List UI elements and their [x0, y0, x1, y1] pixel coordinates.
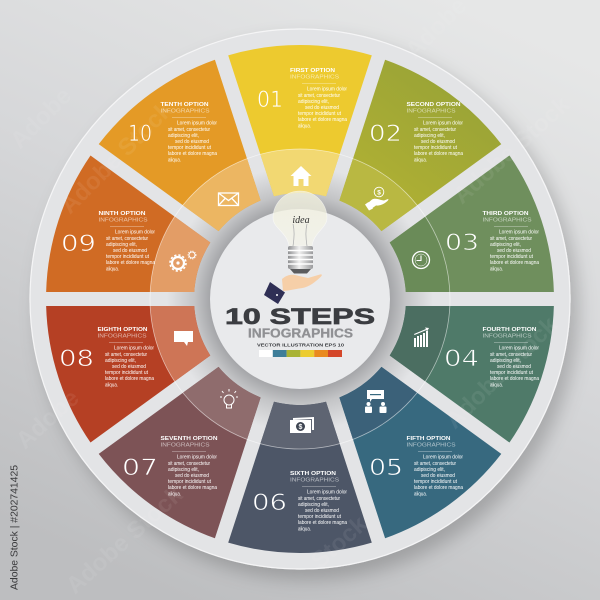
icon: house: [290, 166, 312, 186]
text block: ninth option: INFOGRAPHICS: [98, 218, 148, 224]
text block: second option: INFOGRAPHICS: [406, 108, 456, 114]
text block: second option: labore et dolore magna: [414, 151, 463, 157]
watermark: Adobe Stock: [440, 311, 563, 434]
text block: ninth option: Lorem ipsum dolor: [115, 230, 155, 236]
text block: ninth option: [98, 211, 155, 272]
number 10: 10: [128, 122, 152, 147]
sector 01: [228, 45, 372, 196]
watermark: Adobe Stock: [448, 91, 576, 209]
text block: seventh option: sit amet, consectetur: [168, 461, 210, 467]
text block: second option: sit amet, consectetur: [414, 127, 456, 133]
inner band outline: [150, 149, 450, 449]
text block: seventh option: sed do eiusmod: [175, 473, 209, 479]
text block: first option: aliqua.: [298, 123, 311, 129]
icon: gears: [170, 251, 196, 271]
icon: hand with coin: $: [377, 189, 381, 196]
text block: tenth option: adipiscing elit,: [168, 133, 199, 139]
idea light bulb: [273, 191, 327, 274]
text block: tenth option: aliqua.: [168, 157, 181, 163]
text block: third option: adipiscing elit,: [490, 242, 521, 248]
heading: 10 steps: 10 STEPS: [225, 304, 375, 329]
text block: third option: sit amet, consectetur: [490, 236, 532, 242]
text block: seventh option: adipiscing elit,: [168, 467, 199, 473]
text block: fifth option: aliqua.: [414, 491, 427, 497]
text block: fifth option: tempor incididunt ut: [414, 479, 458, 485]
watermark: Adobe Stock: [61, 481, 189, 599]
text block: sixth option: Lorem ipsum dolor: [307, 490, 347, 496]
text block: seventh option: [160, 436, 218, 497]
text block: sixth option: [290, 471, 347, 532]
text block: third option: sed do eiusmod: [497, 248, 531, 254]
text block: sixth option: INFOGRAPHICS: [290, 478, 340, 484]
text block: ninth option: adipiscing elit,: [106, 242, 137, 248]
text block: fourth option: sed do eiusmod: [497, 364, 531, 370]
text block: ninth option: NINTH OPTION: [98, 211, 146, 217]
hub shadow ring: [160, 159, 440, 439]
text block: fifth option: sit amet, consectetur: [414, 461, 456, 467]
center disc: [210, 209, 390, 389]
text block: first option: sit amet, consectetur: [298, 93, 340, 99]
text block: fourth option: sit amet, consectetur: [490, 352, 532, 358]
text block: fifth option: FIFTH OPTION: [406, 436, 451, 442]
text block: tenth option: INFOGRAPHICS: [160, 108, 210, 114]
text block: tenth option: tempor incididunt ut: [168, 145, 212, 151]
stock credit: Adobe Stock | #202741425: [8, 465, 20, 590]
text block: sixth option: adipiscing elit,: [298, 502, 329, 508]
text block: sixth option: tempor incididunt ut: [298, 514, 342, 520]
text block: tenth option: TENTH OPTION: [160, 102, 209, 108]
number 07: 07: [122, 456, 158, 481]
text block: third option: labore et dolore magna: [490, 260, 539, 266]
text block: fifth option: [406, 436, 463, 497]
text block: second option: SECOND OPTION: [406, 102, 461, 108]
text block: first option: adipiscing elit,: [298, 99, 329, 105]
number 03: 03: [445, 231, 479, 256]
number 04: 04: [444, 347, 479, 372]
text block: first option: Lorem ipsum dolor: [307, 87, 347, 93]
text block: fourth option: labore et dolore magna: [490, 376, 539, 382]
text block: first option: FIRST OPTION: [290, 68, 336, 74]
number 08: 08: [59, 347, 94, 372]
text block: ninth option: aliqua.: [106, 266, 119, 272]
watermark: Adobe: [11, 384, 85, 454]
sector 09: [36, 152, 224, 336]
subheading: infographics: INFOGRAPHICS: [248, 326, 353, 340]
text block: first option: [290, 68, 347, 129]
text block: second option: adipiscing elit,: [414, 133, 445, 139]
text block: first option: sed do eiusmod: [305, 105, 339, 111]
text block: second option: Lorem ipsum dolor: [423, 121, 463, 127]
text block: eighth option: sed do eiusmod: [112, 364, 146, 370]
text block: third option: INFOGRAPHICS: [482, 218, 532, 224]
text block: second option: [406, 102, 463, 163]
text block: second option: sed do eiusmod: [421, 139, 455, 145]
text block: seventh option: Lorem ipsum dolor: [177, 455, 217, 461]
text block: sixth option: aliqua.: [298, 526, 311, 532]
sector 05: [302, 340, 507, 547]
text block: eighth option: Lorem ipsum dolor: [114, 346, 154, 352]
icon: clock: [412, 252, 430, 268]
text block: first option: labore et dolore magna: [298, 117, 347, 123]
number 05: 05: [369, 456, 403, 481]
icon: envelope: [218, 193, 238, 206]
text block: ninth option: labore et dolore magna: [106, 260, 155, 266]
text block: tenth option: labore et dolore magna: [168, 151, 217, 157]
text block: seventh option: labore et dolore magna: [168, 485, 217, 491]
text block: eighth option: adipiscing elit,: [105, 358, 136, 364]
text block: eighth option: aliqua.: [105, 382, 118, 388]
text block: seventh option: SEVENTH OPTION: [160, 436, 218, 442]
text block: fifth option: labore et dolore magna: [414, 485, 463, 491]
text block: fourth option: [482, 327, 539, 388]
number 02: 02: [369, 122, 402, 147]
text block: second option: tempor incididunt ut: [414, 145, 458, 151]
text block: eighth option: tempor incididunt ut: [105, 370, 149, 376]
text block: first option: INFOGRAPHICS: [290, 74, 340, 80]
text block: third option: aliqua.: [490, 266, 503, 272]
icon: speech bubble: [174, 331, 193, 346]
text block: first option: tempor incididunt ut: [298, 111, 342, 117]
colour bar: [259, 350, 342, 357]
text block: third option: THIRD OPTION: [482, 211, 529, 217]
text block: seventh option: tempor incididunt ut: [168, 479, 212, 485]
watermark: Adobe: [5, 82, 77, 154]
icon: bar chart: [414, 328, 429, 347]
text block: sixth option: labore et dolore magna: [298, 520, 347, 526]
text block: eighth option: labore et dolore magna: [105, 376, 154, 382]
text block: third option: Lorem ipsum dolor: [499, 230, 539, 236]
sector 08: [36, 262, 224, 446]
text block: second option: aliqua.: [414, 157, 427, 163]
text block: fifth option: adipiscing elit,: [414, 467, 445, 473]
text block: fourth option: aliqua.: [490, 382, 503, 388]
text block: sixth option: sed do eiusmod: [305, 508, 339, 514]
number 09: 09: [61, 232, 96, 257]
sector 03: [376, 152, 564, 336]
icon: banknotes: [290, 417, 314, 433]
caption: VECTOR ILLUSTRATION EPS 10: [257, 342, 345, 348]
text block: fifth option: INFOGRAPHICS: [406, 442, 456, 448]
text block: sixth option: sit amet, consectetur: [298, 496, 340, 502]
text block: tenth option: sit amet, consectetur: [168, 127, 210, 133]
icon: light bulb: [220, 389, 238, 408]
text block: ninth option: sed do eiusmod: [113, 248, 147, 254]
icon: people with speech bubble: [365, 390, 386, 413]
text block: fifth option: sed do eiusmod: [421, 473, 455, 479]
sector 04: [376, 262, 564, 446]
sector 06: [228, 402, 372, 553]
text block: third option: tempor incididunt ut: [490, 254, 534, 260]
watermark: Adobe Stock: [55, 96, 178, 219]
number 06: 06: [252, 491, 287, 516]
hand icon: [264, 274, 322, 304]
text block: third option: [482, 211, 539, 272]
text block: tenth option: sed do eiusmod: [175, 139, 209, 145]
text block: eighth option: [98, 327, 154, 388]
text block: eighth option: sit amet, consectetur: [105, 352, 147, 358]
text block: eighth option: INFOGRAPHICS: [98, 334, 147, 340]
text block: sixth option: SIXTH OPTION: [290, 471, 337, 477]
idea light bulb: idea: [292, 215, 310, 226]
text block: eighth option: EIGHTH OPTION: [98, 327, 148, 333]
text block: fourth option: INFOGRAPHICS: [482, 334, 532, 340]
text block: ninth option: tempor incididunt ut: [106, 254, 150, 260]
sector 02: [302, 51, 507, 258]
text block: tenth option: Lorem ipsum dolor: [177, 121, 217, 127]
text block: fourth option: Lorem ipsum dolor: [499, 346, 539, 352]
sector 07: [93, 340, 298, 547]
icon: banknotes: $: [299, 424, 303, 431]
text block: fourth option: adipiscing elit,: [490, 358, 521, 364]
text block: fifth option: Lorem ipsum dolor: [423, 455, 463, 461]
text block: tenth option: [160, 102, 217, 163]
text block: seventh option: aliqua.: [168, 491, 181, 497]
text block: fourth option: tempor incididunt ut: [490, 370, 534, 376]
text block: seventh option: INFOGRAPHICS: [160, 442, 210, 448]
watermark: Stock: [306, 510, 373, 574]
icon: hand with coin: [365, 187, 388, 210]
sector 10: [93, 51, 298, 258]
text block: ninth option: sit amet, consectetur: [106, 236, 148, 242]
number 01: 01: [257, 88, 283, 113]
text block: fourth option: FOURTH OPTION: [482, 327, 537, 333]
